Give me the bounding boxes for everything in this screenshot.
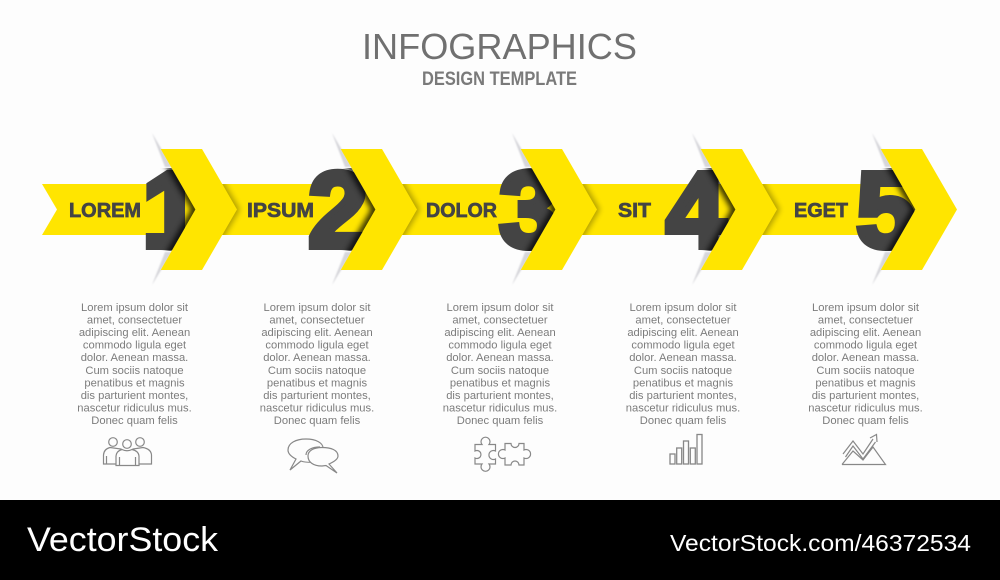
step 3: dolor	[426, 133, 600, 285]
step 5 cut sliver	[872, 133, 892, 285]
step 3 number: 3	[499, 149, 559, 270]
step 3 label: DOLOR	[426, 200, 498, 222]
text block 2: dis parturient montes,	[263, 390, 371, 402]
step 3 outer shadow	[582, 184, 602, 235]
text block 1: Cum sociis natoque	[85, 365, 184, 377]
text block 3: commodo ligula eget	[448, 340, 553, 352]
step 5 number: 5	[856, 149, 916, 270]
text block 2: amet, consectetuer	[269, 315, 365, 327]
step 4: sit	[618, 133, 780, 285]
text block 4: penatibus et magnis	[633, 377, 733, 389]
step 2 inner shadow	[342, 168, 376, 251]
step 2 chevron	[341, 149, 417, 270]
text block 5: dolor. Aenean massa.	[812, 352, 919, 364]
text block 4: commodo ligula eget	[631, 340, 736, 352]
title: INFOGRAPHICS	[362, 26, 637, 67]
text block 1: adipiscing elit. Aenean	[79, 327, 190, 339]
step 5 label: EGET	[794, 200, 848, 222]
step 4 chevron	[701, 149, 777, 270]
text block 4: adipiscing elit. Aenean	[627, 327, 739, 339]
text block 5: Lorem ipsum dolor sit	[812, 302, 920, 314]
text block 3: penatibus et magnis	[450, 377, 550, 389]
step 1 cut sliver	[152, 133, 172, 285]
text block 4: dolor. Aenean massa.	[629, 352, 737, 364]
step 1: lorem	[69, 133, 240, 285]
text block 4: Donec quam felis	[640, 415, 727, 427]
step 4 label: SIT	[618, 200, 651, 222]
text block 3: Donec quam felis	[457, 415, 544, 427]
step 5 inner shadow	[882, 168, 916, 251]
ribbon band	[42, 184, 915, 235]
step 2 cut sliver	[332, 133, 352, 285]
step 1 label: LOREM	[69, 200, 141, 222]
step 1 inner shadow	[162, 168, 196, 251]
text block 2: Lorem ipsum dolor sit	[264, 302, 371, 314]
text block 3: dolor. Aenean massa.	[446, 352, 554, 364]
step 1 number: 1	[142, 149, 202, 270]
step 1 outer shadow	[222, 184, 242, 235]
text block 1: dolor. Aenean massa.	[81, 352, 188, 364]
text block 2: dolor. Aenean massa.	[263, 352, 371, 364]
text block 3: Lorem ipsum dolor sit	[447, 302, 554, 314]
footer logo text: VectorStock	[27, 521, 219, 559]
step 3 cut sliver	[512, 133, 532, 285]
icon: puzzle pieces	[475, 437, 531, 471]
text block 4: Cum sociis natoque	[634, 365, 732, 377]
text block 3: adipiscing elit. Aenean	[444, 327, 556, 339]
step 4 cut sliver	[692, 133, 712, 285]
step 4 inner shadow	[702, 168, 736, 251]
text block 2: commodo ligula eget	[265, 340, 370, 352]
text block 1: Donec quam felis	[91, 415, 178, 427]
text block 3: amet, consectetuer	[452, 315, 548, 327]
text block 5: penatibus et magnis	[815, 377, 916, 389]
text block 3: nascetur ridiculus mus.	[443, 402, 557, 414]
text block 2: Cum sociis natoque	[268, 365, 366, 377]
step 4 number: 4	[666, 149, 726, 270]
text block 5: nascetur ridiculus mus.	[808, 402, 923, 414]
text block 2: nascetur ridiculus mus.	[260, 402, 374, 414]
text block 1: dis parturient montes,	[81, 390, 188, 402]
step 2 label: IPSUM	[247, 200, 314, 222]
icon: people	[104, 438, 152, 466]
step 5 chevron	[881, 149, 957, 270]
step 4 outer shadow	[762, 184, 782, 235]
text block 2: Donec quam felis	[274, 415, 361, 427]
step 2: ipsum	[247, 133, 420, 285]
text block 1: penatibus et magnis	[84, 377, 185, 389]
step 1 chevron	[161, 149, 237, 270]
text block 4: dis parturient montes,	[629, 390, 737, 402]
text block 5: commodo ligula eget	[814, 340, 918, 352]
step 2 outer shadow	[402, 184, 422, 235]
text block 5: Donec quam felis	[822, 415, 909, 427]
text block 5: dis parturient montes,	[812, 390, 919, 402]
footer band	[0, 500, 1000, 580]
text block 3: Cum sociis natoque	[451, 365, 549, 377]
text block 4: amet, consectetuer	[635, 315, 731, 327]
icon: mountain growth chart	[842, 434, 886, 464]
text block 2: adipiscing elit. Aenean	[261, 327, 373, 339]
step 3 inner shadow	[522, 168, 556, 251]
icon: speech bubbles	[288, 439, 338, 473]
text block 5: amet, consectetuer	[818, 315, 913, 327]
step 2 number: 2	[308, 149, 368, 270]
text block 3: dis parturient montes,	[446, 390, 554, 402]
footer url text: VectorStock.com/46372534	[670, 530, 971, 556]
text block 5: adipiscing elit. Aenean	[810, 327, 921, 339]
text block 4: nascetur ridiculus mus.	[626, 402, 740, 414]
step 3 chevron	[521, 149, 597, 270]
text block 4: Lorem ipsum dolor sit	[630, 302, 737, 314]
step 5: eget	[794, 133, 957, 285]
text block 5: Cum sociis natoque	[816, 365, 915, 377]
text block 2: penatibus et magnis	[267, 377, 367, 389]
subtitle: DESIGN TEMPLATE	[422, 69, 577, 90]
text block 1: commodo ligula eget	[83, 340, 187, 352]
icon: bar chart	[670, 434, 702, 464]
text block 1: Lorem ipsum dolor sit	[81, 302, 189, 314]
text block 1: amet, consectetuer	[87, 315, 182, 327]
text block 1: nascetur ridiculus mus.	[77, 402, 192, 414]
